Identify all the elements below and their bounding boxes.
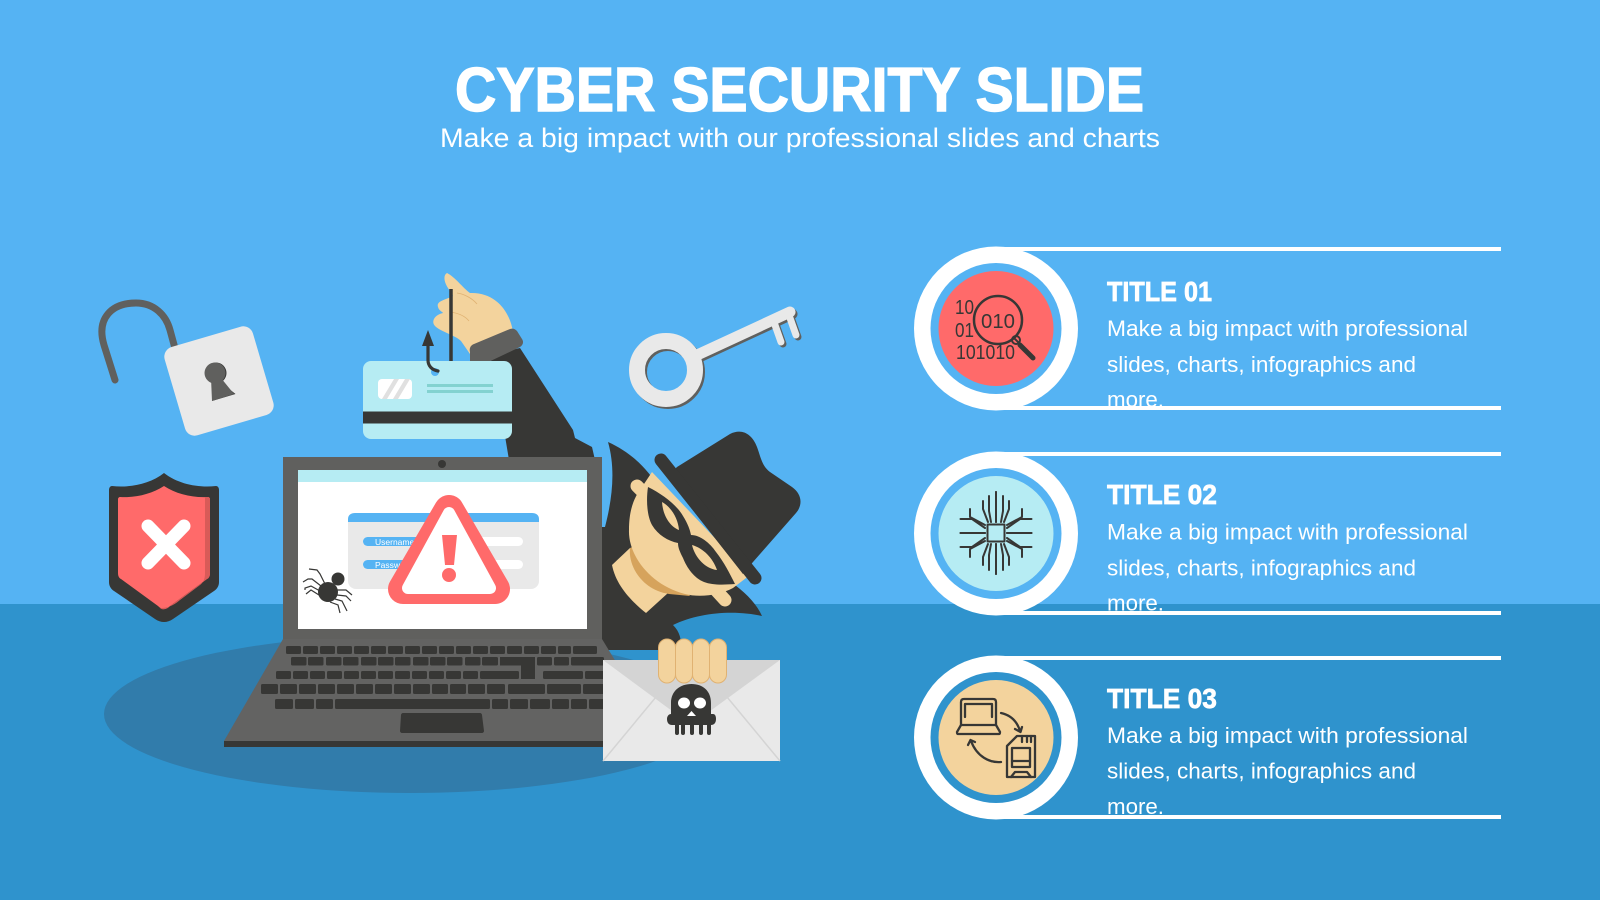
icon: binary magnifier: 10 (955, 296, 974, 319)
icon: binary magnifier (955, 296, 1033, 364)
frame lines (1000, 658, 1501, 817)
body text: Make a big impact with professional (1107, 316, 1468, 341)
hacker hand holding line (433, 273, 513, 361)
login form: Password (375, 560, 413, 570)
body text: Make a big impact with professional (1107, 723, 1468, 748)
icon: binary magnifier: 101010 (956, 341, 1015, 364)
icon: warning triangle (403, 510, 495, 589)
body text: more. (1107, 387, 1164, 412)
icon: key (637, 312, 798, 401)
body text (1107, 316, 1468, 412)
floor band (0, 604, 1600, 900)
laptop (224, 457, 664, 747)
body text: slides, charts, infographics and (1107, 556, 1416, 580)
body text: slides, charts, infographics and (1107, 352, 1416, 377)
frame lines (1000, 454, 1501, 613)
title: CYBER SECURITY SLIDE (455, 56, 1144, 125)
body text (1107, 723, 1468, 819)
sleeve cuff (470, 329, 523, 366)
cloak (600, 442, 762, 650)
badge (914, 656, 1078, 820)
login form (348, 513, 539, 589)
icon: binary magnifier: 010 (981, 310, 1015, 333)
badge (914, 452, 1078, 616)
credit card (363, 361, 512, 439)
ears (637, 486, 725, 600)
body text: slides, charts, infographics and (1107, 758, 1416, 784)
panel: item 01 (914, 246, 1501, 412)
icon: spider (303, 569, 352, 613)
frame lines (1000, 249, 1501, 408)
login form: Username (375, 537, 414, 547)
icon: open padlock (102, 303, 276, 438)
icon: binary magnifier: 01 (955, 319, 974, 342)
heading: TITLE 01 (1107, 276, 1212, 307)
neck shadow (630, 540, 690, 596)
hat brim (661, 460, 755, 578)
neck (612, 548, 668, 613)
icon: shield with cross (109, 473, 219, 622)
heading: TITLE 02 (1107, 479, 1217, 510)
envelope (603, 660, 780, 761)
body text: more. (1107, 794, 1164, 819)
hat (667, 432, 801, 574)
laptop base (224, 639, 664, 741)
panel: item 03 (914, 656, 1501, 820)
laptop lid (283, 457, 602, 639)
mask (647, 487, 735, 585)
fishing hook arrow (422, 330, 438, 371)
keyboard (261, 646, 604, 709)
heading: TITLE 03 (1107, 683, 1217, 714)
floor shadow ellipse (104, 635, 716, 793)
laptop screen (298, 470, 587, 629)
panel: item 02 (914, 452, 1501, 616)
body text: more. (1107, 590, 1164, 616)
badge (914, 246, 1078, 410)
body text (1107, 520, 1468, 616)
hacker fingers (658, 639, 726, 683)
body text: Make a big impact with professional (1107, 520, 1468, 544)
face (629, 472, 750, 596)
icon: skull (667, 684, 716, 735)
mask eye holes (662, 502, 717, 570)
trackpad (400, 713, 484, 733)
hacker arm sleeve (490, 348, 595, 460)
icon: circuit chip (960, 492, 1032, 574)
icon: laptop and memory card transfer (957, 699, 1035, 777)
hacker character (600, 432, 801, 650)
subtitle: Make a big impact with our professional slides and charts (440, 123, 1160, 153)
